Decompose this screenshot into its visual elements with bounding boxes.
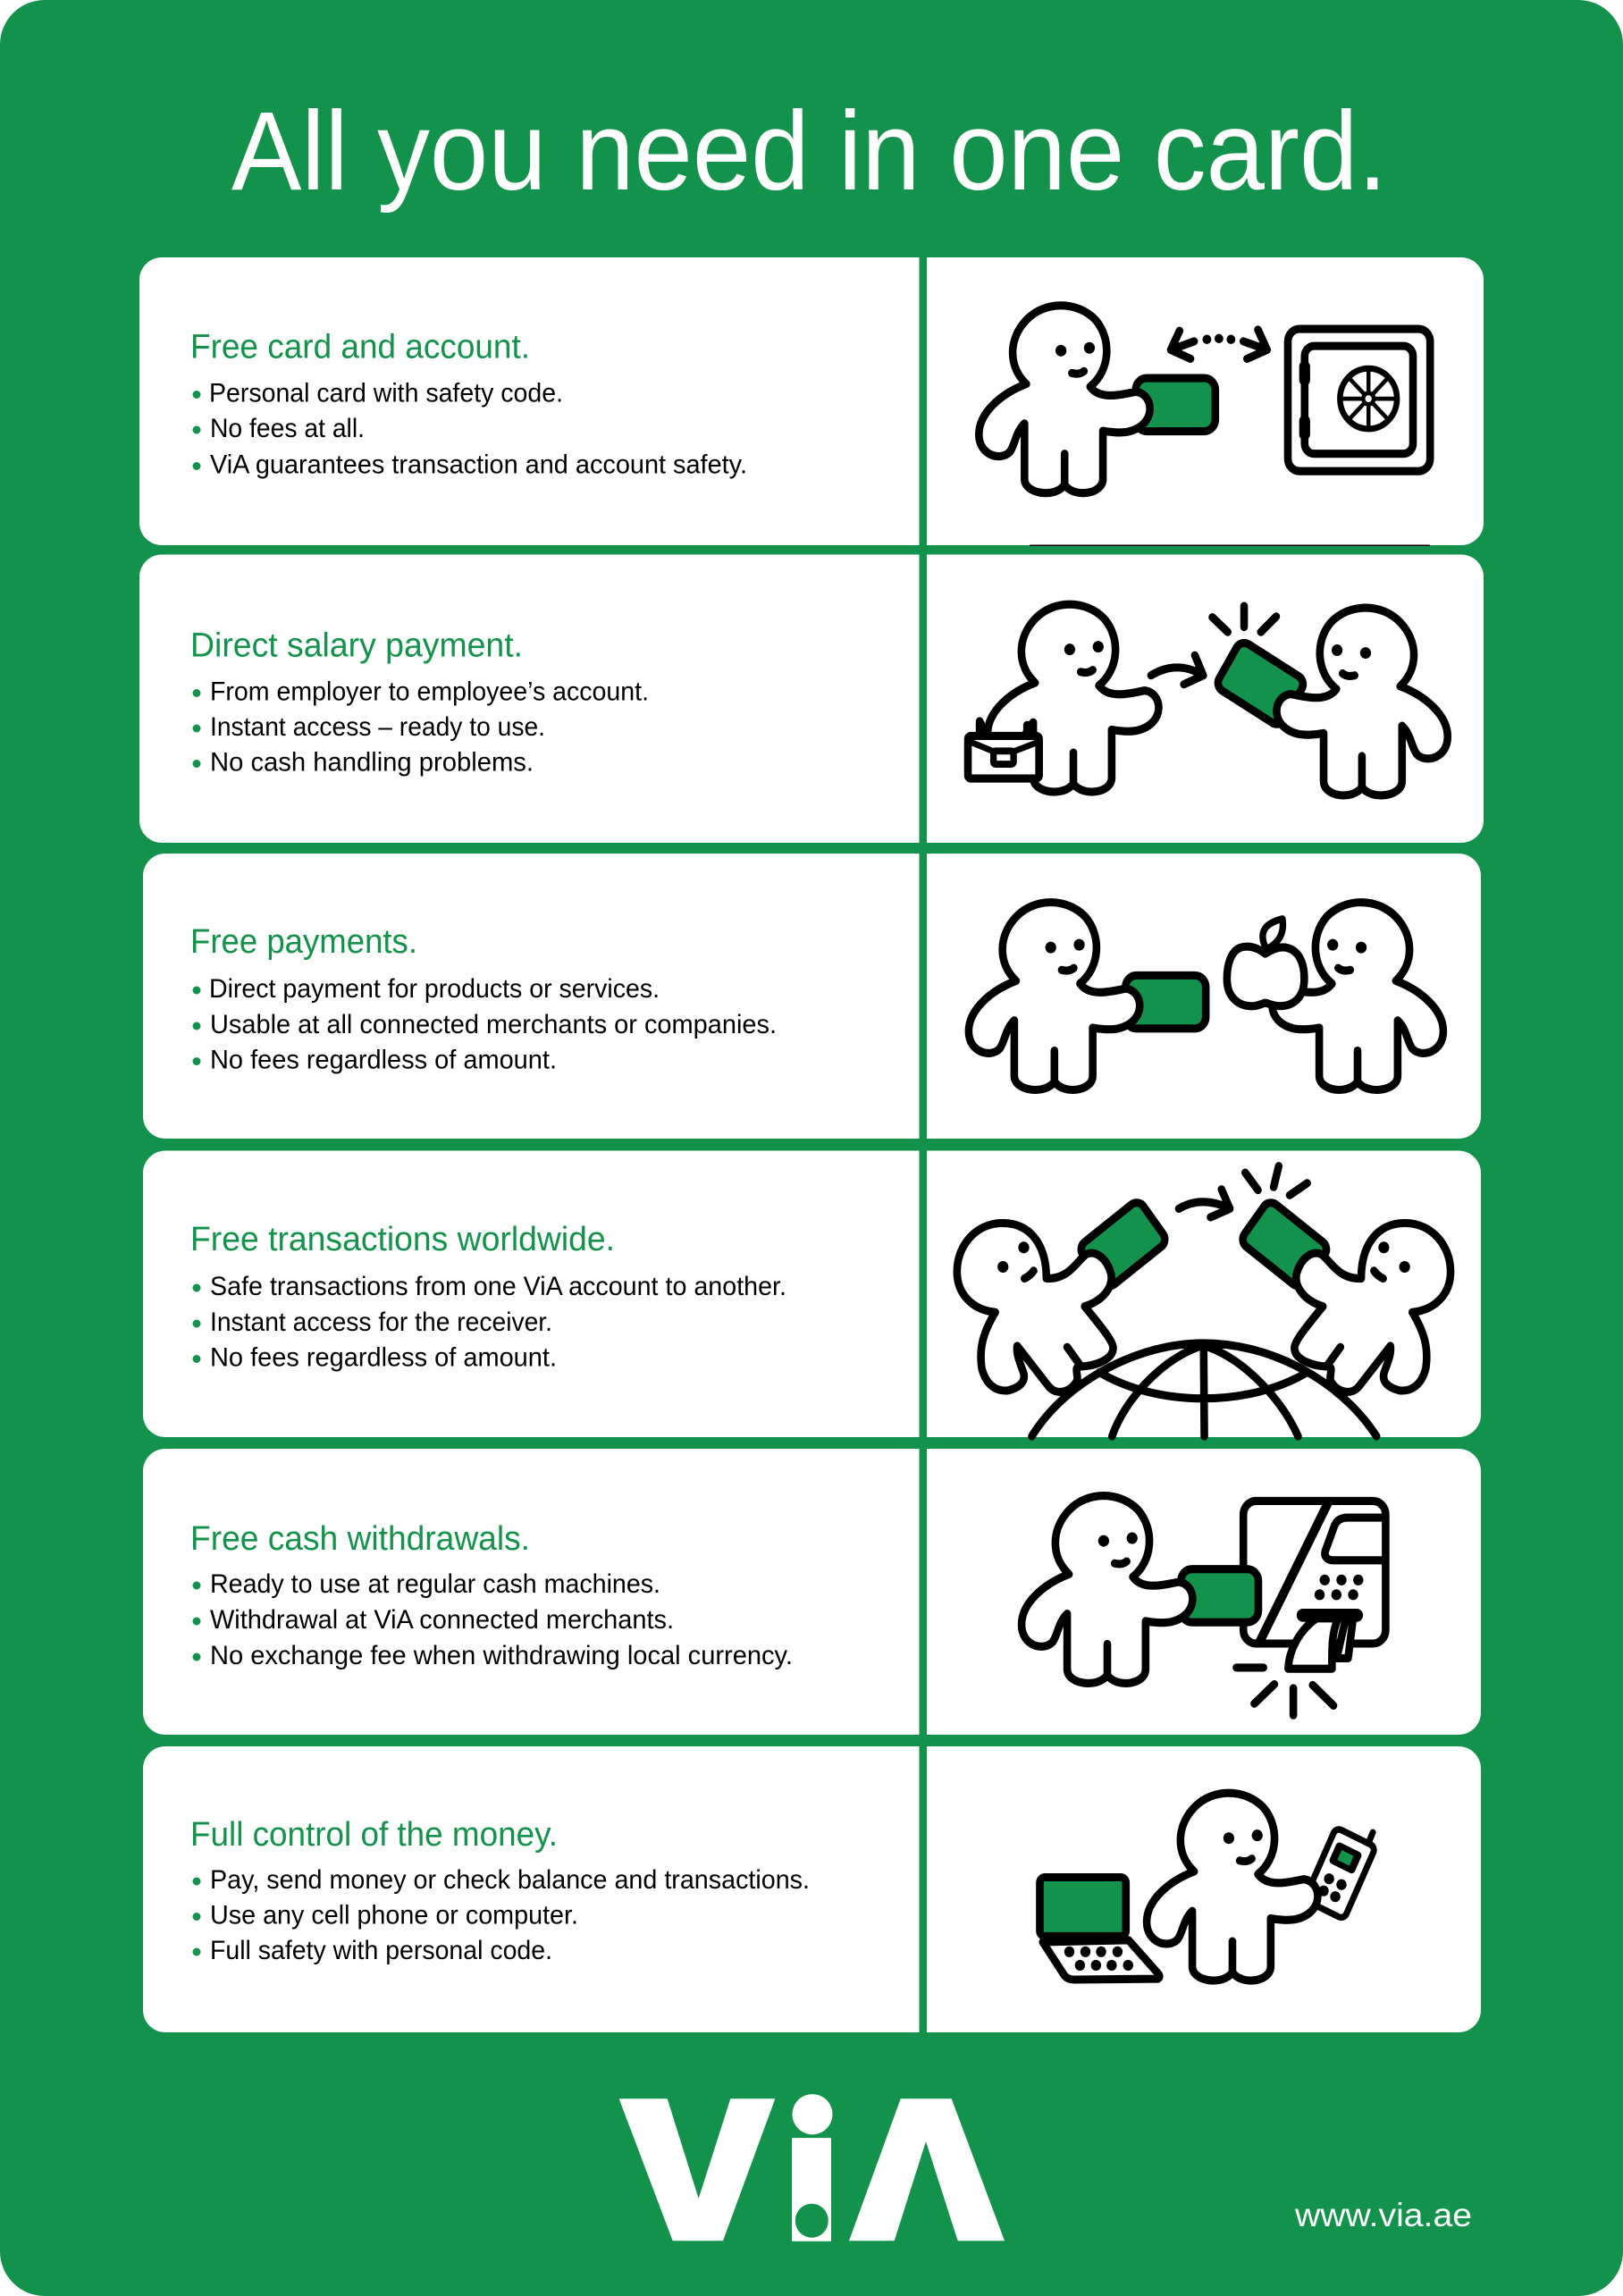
text: free payments: Usable at all connected merchants or companies. (210, 1010, 777, 1039)
text: free payments: Direct payment for products or services. (209, 974, 660, 1004)
icon: briefcase (968, 736, 1039, 778)
icon: person with card and safe (979, 306, 1430, 493)
text: free transactions worldwide: Safe transactions from one ViA account to another. (210, 1272, 786, 1301)
panel: free cash withdrawals (143, 1449, 1481, 1735)
icon: person with laptop and cell phone (1039, 1793, 1375, 1981)
text: direct salary payment: No cash handling problems. (210, 747, 534, 778)
text: free card and account: Free card and account. (190, 329, 530, 366)
text: direct salary payment: From employer to employee’s account. (210, 677, 649, 706)
panel: full control of the money (143, 1746, 1481, 2032)
panel: direct salary payment (139, 554, 1484, 843)
panel: free card and account (139, 257, 1484, 546)
text: free payments: No fees regardless of amount. (210, 1046, 557, 1074)
text: free card and account: Personal card with safety code. (209, 379, 563, 408)
text: free cash withdrawals: Ready to use at regular cash machines. (210, 1569, 660, 1599)
icon: paying with card for apple (969, 903, 1443, 1089)
text: free transactions worldwide: No fees regardless of amount. (210, 1342, 557, 1373)
text: free card and account: ViA guarantees transaction and account safety. (210, 450, 747, 479)
text: free payments (190, 923, 777, 1074)
text: direct salary payment (190, 627, 649, 778)
icon: card transfer over the globe (957, 1166, 1451, 1436)
text: free cash withdrawals (190, 1520, 793, 1670)
text: direct salary payment: Instant access – ready to use. (210, 712, 545, 742)
text: direct salary payment: Direct salary payment. (190, 627, 523, 665)
text: free card and account (190, 329, 747, 479)
icon: cash machine withdrawal (1022, 1496, 1385, 1715)
text: full control of the money: Full control of the money. (190, 1816, 558, 1854)
icon: cell phone (1304, 1828, 1375, 1920)
panel: free transactions worldwide (143, 1150, 1481, 1437)
text: free payments: Free payments. (190, 923, 417, 961)
text: free transactions worldwide: Free transactions worldwide. (190, 1221, 615, 1258)
logo: ViA (618, 2094, 1005, 2241)
icon: salary card from employer to employee (968, 604, 1448, 795)
text: full control of the money: Full safety with personal code. (210, 1936, 552, 1965)
logo: ViA: Λ (847, 2061, 1006, 2283)
logo: ViA: i (777, 2058, 846, 2284)
website url: www.via.ae (1294, 2197, 1472, 2233)
text: full control of the money (190, 1816, 810, 1965)
text: free cash withdrawals: Withdrawal at ViA connected merchants. (210, 1605, 674, 1635)
text: free cash withdrawals: Free cash withdrawals. (190, 1520, 530, 1558)
panel: free payments (143, 854, 1481, 1139)
text: free cash withdrawals: No exchange fee when withdrawing local currency. (210, 1641, 793, 1670)
text: full control of the money: Pay, send money or check balance and transactions. (210, 1865, 810, 1895)
text: free transactions worldwide (190, 1221, 786, 1373)
title: All you need in one card. (231, 89, 1387, 214)
icon: apple (1227, 919, 1304, 1006)
text: free transactions worldwide: Instant access for the receiver. (210, 1308, 552, 1337)
icon: laptop (1039, 1878, 1159, 1980)
text: free card and account: No fees at all. (210, 414, 365, 443)
logo: ViA: V (618, 2061, 777, 2283)
text: full control of the money: Use any cell phone or computer. (210, 1900, 578, 1930)
